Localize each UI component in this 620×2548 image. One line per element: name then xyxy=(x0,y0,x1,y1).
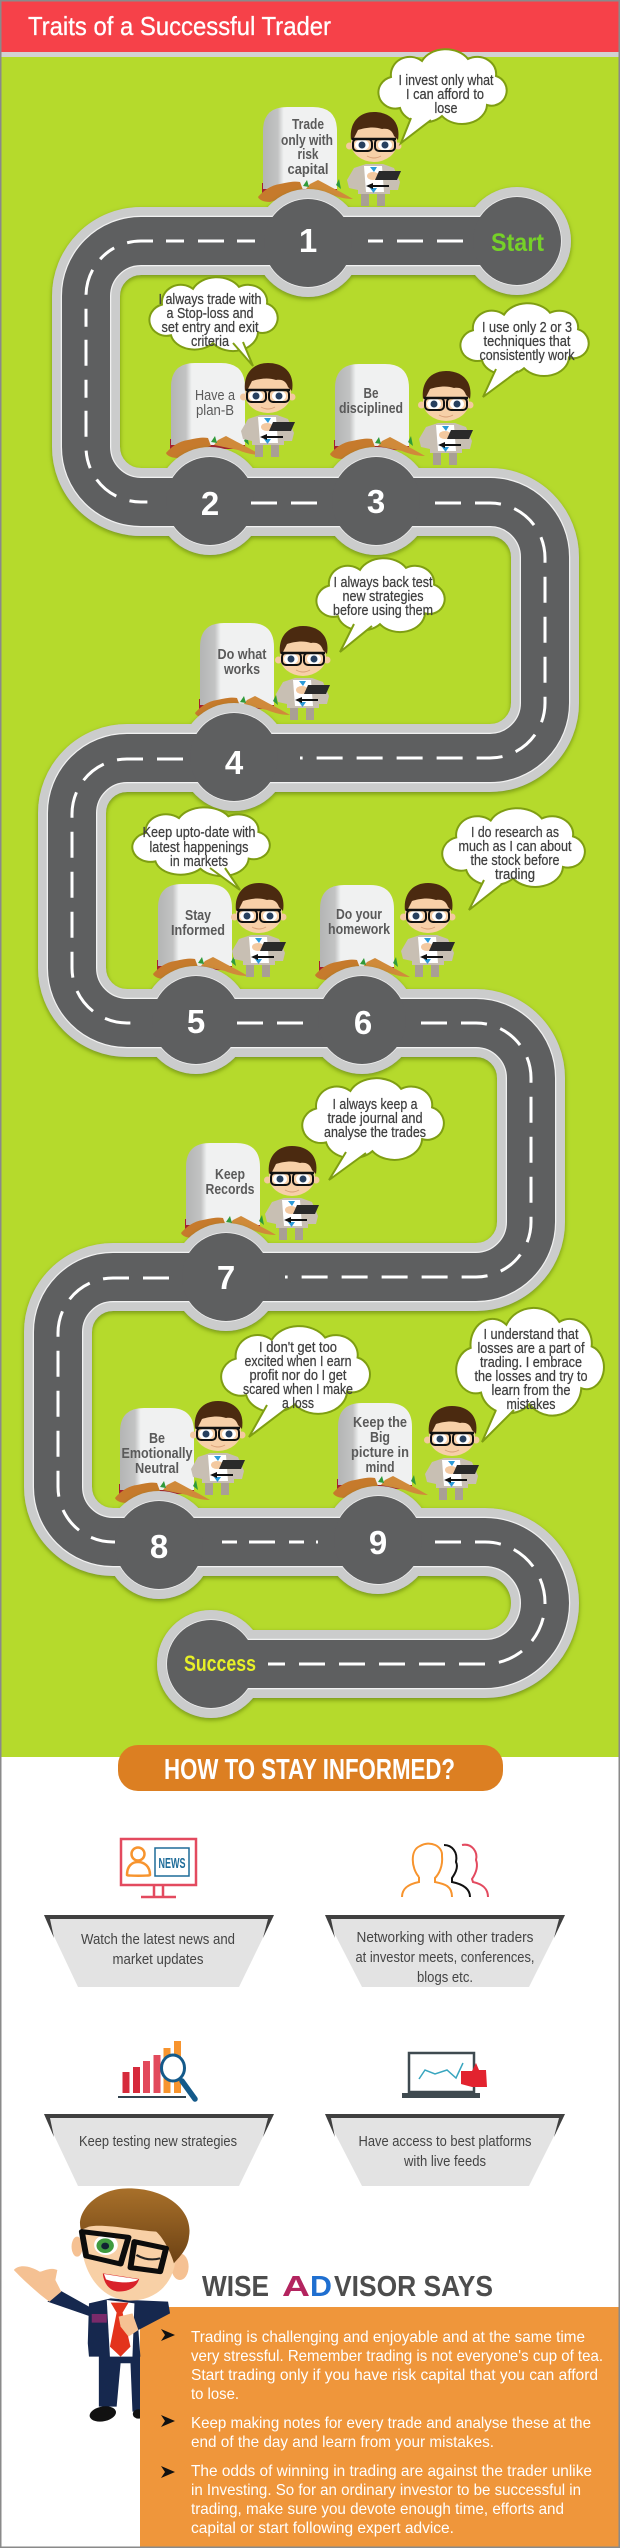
icon: bar chart with magnifier xyxy=(118,2041,195,2099)
wise advisor text panel: to lose. xyxy=(191,2386,239,2403)
tombstone text 9: picture in xyxy=(351,1444,409,1461)
speech bubble 7: analyse the trades xyxy=(324,1124,426,1141)
tombstone text 1 xyxy=(281,116,333,178)
icon: laptop with thumbs up xyxy=(402,2053,487,2098)
character 2 xyxy=(240,363,296,457)
speech bubble 1: I invest only what xyxy=(398,72,494,89)
tombstone text 3: Be xyxy=(364,385,378,402)
road label: Success: Success xyxy=(184,1651,256,1676)
step number 1: 1 xyxy=(299,222,317,259)
card: best platforms: Have access to best platforms xyxy=(358,2133,532,2150)
character 4 xyxy=(275,626,330,720)
tombstone text 5 xyxy=(171,907,225,939)
tombstone: Have a plan-B xyxy=(166,363,261,458)
icon: news monitor xyxy=(121,1839,196,1897)
speech bubble 2: I always trade with xyxy=(158,291,262,308)
speech bubble 8: excited when I earn xyxy=(244,1353,352,1370)
icon: news monitor: NEWS xyxy=(158,1855,186,1872)
wise advisor text panel: in Investing. So for an ordinary investor to be successful in xyxy=(191,2482,581,2499)
speech bubble 2: criteria xyxy=(191,333,230,350)
wise advisor heading: D xyxy=(310,2271,332,2303)
speech bubble 4: before using them xyxy=(333,602,433,619)
speech bubble 2: a Stop-loss and xyxy=(166,305,254,322)
wise advisor text panel: The odds of winning in trading are against the trader unlike xyxy=(191,2463,592,2480)
character 9 xyxy=(424,1406,480,1500)
speech bubble 7: I always keep a xyxy=(332,1096,418,1113)
tombstone: Keep Records xyxy=(181,1143,276,1238)
header banner: Traits of a Successful Trader xyxy=(28,11,331,41)
speech bubble 1: lose xyxy=(434,100,458,117)
wise advisor text panel: very stressful. Remember trading is not everyone's cup of tea. xyxy=(191,2348,603,2365)
wise advisor heading: WISE xyxy=(202,2271,269,2303)
advisor legs xyxy=(88,2353,144,2424)
wise advisor text panel: Start trading only if you have risk capital that you can afford xyxy=(191,2367,598,2384)
speech bubble 4: I always back test xyxy=(334,574,433,591)
advisor character xyxy=(14,2188,190,2357)
tombstone text 9: Big xyxy=(370,1429,390,1446)
tombstone text 2: plan-B xyxy=(196,402,234,419)
tombstone text 8 xyxy=(122,1430,193,1477)
character 8 xyxy=(190,1401,246,1495)
step number 6: 6 xyxy=(354,1004,372,1041)
speech bubble 9 xyxy=(456,1308,604,1442)
tombstone text 7: Records xyxy=(206,1181,254,1198)
speech bubble 3 xyxy=(460,303,589,397)
speech bubble 5: latest happenings xyxy=(150,839,248,856)
speech bubble 6: I do research as xyxy=(471,824,559,841)
card: networking xyxy=(325,1915,565,1987)
speech bubble 1: I can afford to xyxy=(406,86,484,103)
step number 4: 4 xyxy=(225,744,244,781)
wise advisor heading xyxy=(202,2271,493,2303)
speech bubble 5: Keep upto-date with xyxy=(142,824,256,841)
speech bubble 9: mistakes xyxy=(506,1396,556,1413)
card: keep testing xyxy=(44,2114,274,2186)
character 1 xyxy=(346,112,402,206)
tombstone text 7 xyxy=(206,1166,254,1198)
tombstone text 6 xyxy=(328,906,391,938)
green road background panel xyxy=(0,57,620,1757)
tombstone: Be disciplined xyxy=(330,364,425,459)
speech bubble 6: much as I can about xyxy=(458,838,572,855)
tombstone text 5: Informed xyxy=(171,922,225,939)
winding road xyxy=(58,187,571,1718)
wise advisor text panel: trading, make sure you devote enough time, efforts and xyxy=(191,2501,564,2518)
speech bubble 8: I don't get too xyxy=(259,1339,337,1356)
speech bubble 5 xyxy=(132,807,270,890)
character 7 xyxy=(264,1146,320,1240)
speech bubble 8: a loss xyxy=(282,1395,314,1412)
card: best platforms xyxy=(325,2114,565,2186)
card: networking: blogs etc. xyxy=(417,1969,473,1986)
tombstone: Trade only with risk capital xyxy=(258,107,353,202)
tombstone text 5: Stay xyxy=(185,907,212,924)
tombstone text 1: Trade xyxy=(292,116,324,133)
step number 9: 9 xyxy=(369,1524,387,1561)
speech bubble 8 xyxy=(221,1326,370,1437)
speech bubble 4: new strategies xyxy=(342,588,424,605)
tombstone text 6: homework xyxy=(328,921,391,938)
tombstone: Do what works xyxy=(195,623,290,718)
step number 8: 8 xyxy=(150,1528,168,1565)
tombstone text 2: Have a xyxy=(195,387,236,404)
speech bubble 1 xyxy=(378,49,507,143)
speech bubble 3: I use only 2 or 3 xyxy=(482,319,572,336)
tombstone text 7: Keep xyxy=(215,1166,245,1183)
wise advisor heading: A xyxy=(282,2271,310,2303)
step number 7: 7 xyxy=(217,1259,235,1296)
section heading: how to stay informed xyxy=(118,1745,503,1791)
tombstone text 2 xyxy=(195,387,236,419)
tombstone text 1: only with xyxy=(281,132,333,149)
tombstone text 8: Emotionally xyxy=(122,1445,193,1462)
step number 5: 5 xyxy=(187,1003,205,1040)
tombstone text 3: disciplined xyxy=(339,400,403,417)
speech bubble 8: scared when I make xyxy=(243,1381,353,1398)
wise advisor text panel xyxy=(140,2307,620,2548)
tombstone text 4: works xyxy=(223,661,260,678)
tombstone text 3 xyxy=(339,385,403,417)
card: best platforms: with live feeds xyxy=(403,2153,486,2170)
header banner xyxy=(0,0,620,57)
card: networking: Networking with other traders xyxy=(356,1929,534,1946)
tombstone text 1: risk xyxy=(298,146,319,163)
card: watch the latest news: market updates xyxy=(112,1951,204,1968)
tombstone text 8: Neutral xyxy=(135,1460,179,1477)
character 3 xyxy=(418,371,474,465)
tombstone text 9: Keep the xyxy=(353,1414,407,1431)
tombstone: Stay Informed xyxy=(153,884,248,979)
section heading: how to stay informed: HOW TO STAY INFORMED? xyxy=(164,1754,455,1786)
tombstone: Keep the Big picture in mind xyxy=(333,1403,428,1498)
speech bubble 8: profit nor do I get xyxy=(250,1367,347,1384)
tombstone text 4: Do what xyxy=(218,646,266,663)
step number 2: 2 xyxy=(201,485,219,522)
speech bubble 9: the losses and try to xyxy=(474,1368,588,1385)
character 5 xyxy=(231,883,286,977)
speech bubble 6: trading xyxy=(495,866,535,883)
speech bubble 9: learn from the xyxy=(492,1382,570,1399)
card: keep testing: Keep testing new strategies xyxy=(79,2133,237,2150)
speech bubble 7 xyxy=(302,1078,444,1180)
character 6 xyxy=(400,883,456,977)
card: watch the latest news xyxy=(44,1915,274,1987)
step number 3: 3 xyxy=(367,483,385,520)
wise advisor text panel: capital or start following expert advice. xyxy=(191,2520,454,2537)
tombstone: Do your homework xyxy=(315,885,410,980)
speech bubble 9: trading. I embrace xyxy=(480,1354,582,1371)
icon: network of people xyxy=(402,1844,488,1897)
tombstone text 9: mind xyxy=(366,1459,394,1476)
tombstone text 6: Do your xyxy=(336,906,382,923)
speech bubble 9: I understand that xyxy=(484,1326,579,1343)
speech bubble 3: techniques that xyxy=(484,333,571,350)
speech bubble 6 xyxy=(442,808,585,910)
wise advisor heading: VISOR SAYS xyxy=(334,2271,493,2303)
speech bubble 3: consistently work xyxy=(480,347,575,364)
wise advisor text panel: end of the day and learn from your mistakes. xyxy=(191,2434,494,2451)
speech bubble 2 xyxy=(149,277,278,366)
card: watch the latest news: Watch the latest news and xyxy=(81,1931,235,1948)
speech bubble 6: the stock before xyxy=(470,852,560,869)
road label: Start: Start xyxy=(491,229,545,257)
speech bubble 7: trade journal and xyxy=(328,1110,422,1127)
tombstone text 1: capital xyxy=(288,161,328,178)
tombstone text 9 xyxy=(351,1414,409,1476)
tombstone text 4 xyxy=(218,646,266,678)
card: networking: at investor meets, conferences, xyxy=(356,1949,534,1966)
tombstone text 8: Be xyxy=(149,1430,165,1447)
tombstone: Be Emotionally Neutral xyxy=(115,1408,210,1503)
speech bubble 4 xyxy=(316,558,445,652)
wise advisor text panel: Keep making notes for every trade and analyse these at the xyxy=(191,2415,591,2432)
speech bubble 5: in markets xyxy=(170,853,228,870)
speech bubble 2: set entry and exit xyxy=(162,319,259,336)
wise advisor text panel: Trading is challenging and enjoyable and at the same time xyxy=(191,2329,585,2346)
speech bubble 9: losses are a part of xyxy=(478,1340,585,1357)
